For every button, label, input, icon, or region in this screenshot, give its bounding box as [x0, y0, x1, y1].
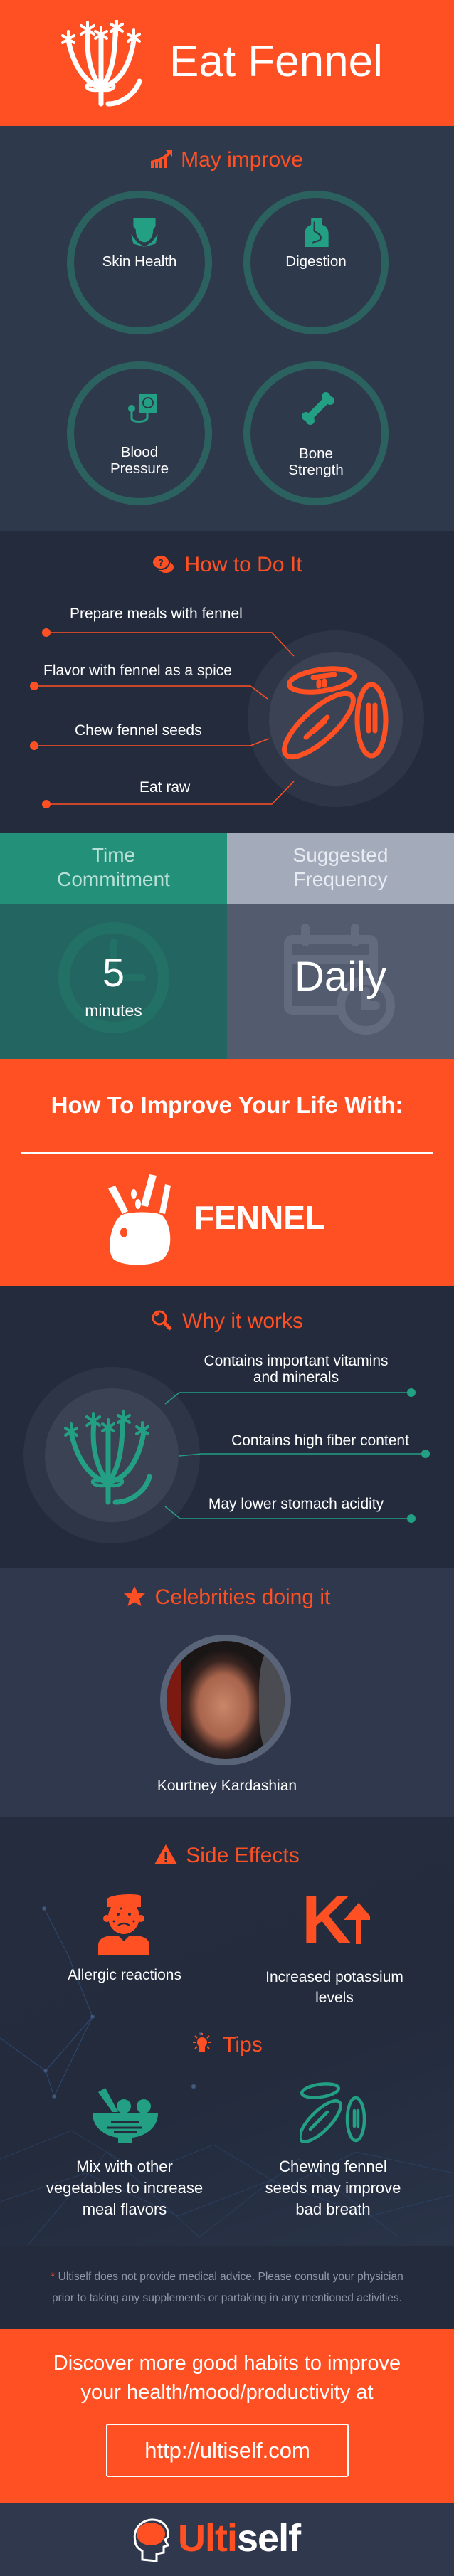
step list [43, 606, 243, 796]
reasons list: Contains high fiber content [231, 1432, 409, 1449]
icon: fennel plant [65, 1411, 149, 1502]
disclaimer [0, 2246, 454, 2329]
url box [106, 2424, 349, 2477]
disclaimer: * Ultiself does not provide medical advice. Please consult your physician [51, 2271, 403, 2283]
banner: how to improve: FENNEL [194, 1199, 325, 1236]
step list: Eat raw [139, 779, 190, 796]
icon: fennel plant [61, 20, 142, 107]
icon: calendar [284, 924, 395, 1035]
benefit: bone strength [243, 361, 389, 505]
panel: celebrities [0, 1568, 454, 1817]
benefit: digestion: Digestion [285, 253, 347, 270]
photo: Kourtney Kardashian [160, 1635, 291, 1765]
tip: mix with vegetables: Mix with other [76, 2158, 173, 2175]
reasons list: and minerals [253, 1369, 339, 1385]
heading: how to do it: How to Do It [184, 553, 302, 576]
benefit: skin health [67, 191, 212, 334]
heading: tips: Tips [223, 2033, 263, 2057]
diagram: plant circle [23, 1367, 430, 1543]
tip: chewing seeds [265, 2082, 401, 2218]
heading: may improve: May improve [181, 148, 303, 171]
benefit: skin health: Skin Health [102, 253, 176, 270]
tip: chewing seeds: bad breath [295, 2200, 371, 2218]
step list: Prepare meals with fennel [70, 606, 243, 622]
benefit: bone strength: Strength [288, 462, 344, 478]
reasons list [204, 1353, 409, 1512]
panel: time commitment [0, 833, 227, 1059]
side effect: increased potassium [265, 1893, 403, 2006]
side effect: allergic reactions: Allergic reactions [68, 1967, 181, 1983]
benefit: blood pressure [67, 361, 212, 505]
heading: tips [193, 2033, 263, 2057]
benefit: blood pressure: Blood [121, 444, 158, 460]
banner: how to improve: How To Improve Your Life With: [51, 1092, 403, 1118]
step list: Chew fennel seeds [75, 722, 202, 739]
decorative network [0, 1906, 454, 2244]
benefit: bone strength: Bone [299, 445, 333, 462]
tip: mix with vegetables: meal flavors [83, 2200, 167, 2218]
call to action: Discover more good habits to improve [53, 2352, 401, 2375]
footer: logo: Ultiself [178, 2517, 300, 2560]
side effect: allergic reactions [68, 1894, 181, 1983]
panel: time commitment: Time [92, 844, 135, 866]
title: Eat Fennel [169, 37, 383, 86]
call to action [0, 2329, 454, 2503]
panel: why it works [0, 1286, 454, 1568]
panel: may improve [0, 126, 454, 531]
footer: logo [0, 2503, 454, 2576]
header [0, 0, 454, 126]
panel: suggested frequency [227, 833, 454, 1059]
heading: celebrities: Celebrities doing it [155, 1585, 330, 1609]
banner: how to improve [0, 1059, 454, 1286]
panel: suggested frequency: Suggested [293, 844, 388, 866]
disclaimer: prior to taking any supplements or partaking in any mentioned activities. [52, 2292, 402, 2304]
panel: side effects and tips [0, 1817, 454, 2246]
tip: chewing seeds: seeds may improve [265, 2179, 401, 2197]
tip: chewing seeds: Chewing fennel [279, 2158, 387, 2175]
icon: clock [58, 922, 169, 1033]
side effect: increased potassium: levels [315, 1990, 354, 2006]
call to action: your health/mood/productivity at [80, 2381, 374, 2404]
url box: http://ultiself.com [144, 2438, 310, 2463]
panel: time commitment: Commitment [57, 868, 170, 890]
benefit: digestion [243, 191, 389, 334]
panel: how to do it [0, 531, 454, 833]
heading: side effects: Side Effects [186, 1844, 300, 1867]
panel: suggested frequency: Frequency [293, 868, 388, 890]
panel: time commitment: minutes [85, 1001, 142, 1020]
tip: mix with vegetables [46, 2088, 203, 2218]
icon: fennel bulb [108, 1174, 171, 1265]
benefit: blood pressure: Pressure [110, 460, 169, 477]
icon: seeds [275, 665, 386, 766]
side effect: increased potassium: Increased potassium [265, 1969, 403, 1985]
diagram: seeds circle [30, 628, 424, 808]
heading: how to do it: ? [158, 557, 164, 568]
reasons list: May lower stomach acidity [208, 1496, 384, 1512]
panel: celebrities: Kourtney Kardashian [157, 1778, 297, 1794]
panel: suggested frequency: Daily [295, 954, 386, 1000]
reasons list: Contains important vitamins [204, 1353, 389, 1369]
heading: why it works: Why it works [182, 1309, 303, 1333]
step list: Flavor with fennel as a spice [43, 663, 232, 679]
tip: mix with vegetables: vegetables to increase [46, 2179, 203, 2197]
panel: time commitment: 5 [102, 950, 125, 995]
